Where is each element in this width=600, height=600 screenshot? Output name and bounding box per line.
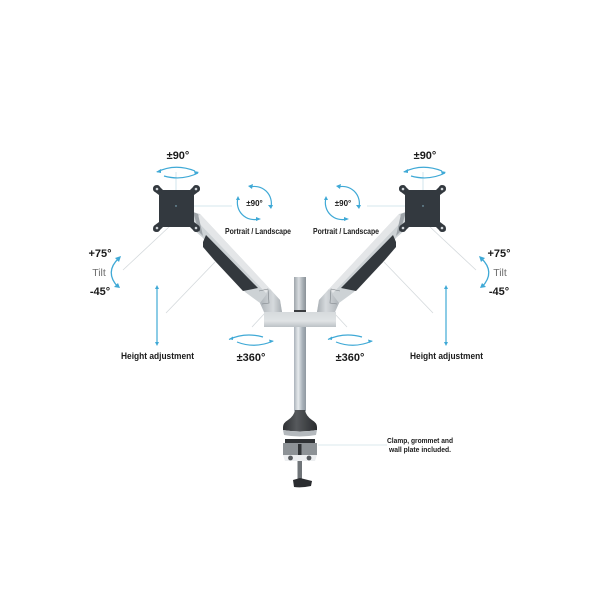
- label: clamp note: [387, 438, 453, 454]
- label: right ±360: ±360°: [336, 352, 364, 364]
- arrow: left swivel ±90: [156, 167, 199, 178]
- arrow: right swivel ±90: [403, 167, 446, 178]
- label: right ±90: ±90°: [414, 150, 436, 162]
- arrow: left swivel 360: [229, 335, 274, 345]
- right arm and mounting plate: [317, 172, 476, 327]
- label: right height adjustment: Height adjustment: [410, 351, 484, 362]
- pole top section: [294, 277, 306, 312]
- label: left height adjustment: Height adjustment: [121, 351, 195, 362]
- clamp base: [283, 410, 317, 487]
- label: right tilt: Tilt: [493, 267, 507, 279]
- arrow: right tilt: [479, 256, 489, 288]
- arrow: left tilt: [111, 256, 121, 288]
- label: left +75: +75°: [88, 248, 112, 260]
- label: clamp note: Clamp, grommet and: [387, 438, 453, 445]
- label: right -45: -45°: [489, 286, 509, 298]
- label: right portrait landscape: Portrait / Landscape: [313, 227, 379, 236]
- arrow: left height: [155, 285, 159, 346]
- crossbar: [264, 312, 336, 327]
- label: left ±360: ±360°: [237, 352, 265, 364]
- label: left rotation ±90: ±90°: [246, 199, 263, 208]
- label: left tilt: Tilt: [92, 267, 106, 279]
- arrow: right swivel 360: [328, 335, 373, 345]
- main pole: [294, 327, 306, 411]
- label: left ±90: ±90°: [167, 150, 189, 162]
- arrow: right portrait rotation: [324, 184, 361, 221]
- left arm and mounting plate: [123, 172, 282, 327]
- arrow: left portrait rotation: [236, 184, 273, 221]
- label: left -45: -45°: [90, 286, 110, 298]
- label: left portrait landscape: Portrait / Landscape: [225, 227, 291, 236]
- arrow: right height: [444, 285, 448, 346]
- label: right rotation ±90: ±90°: [335, 199, 351, 208]
- clamp leader line: [318, 444, 387, 446]
- label: clamp note: wall plate included.: [388, 447, 451, 454]
- label: right +75: +75°: [487, 248, 511, 260]
